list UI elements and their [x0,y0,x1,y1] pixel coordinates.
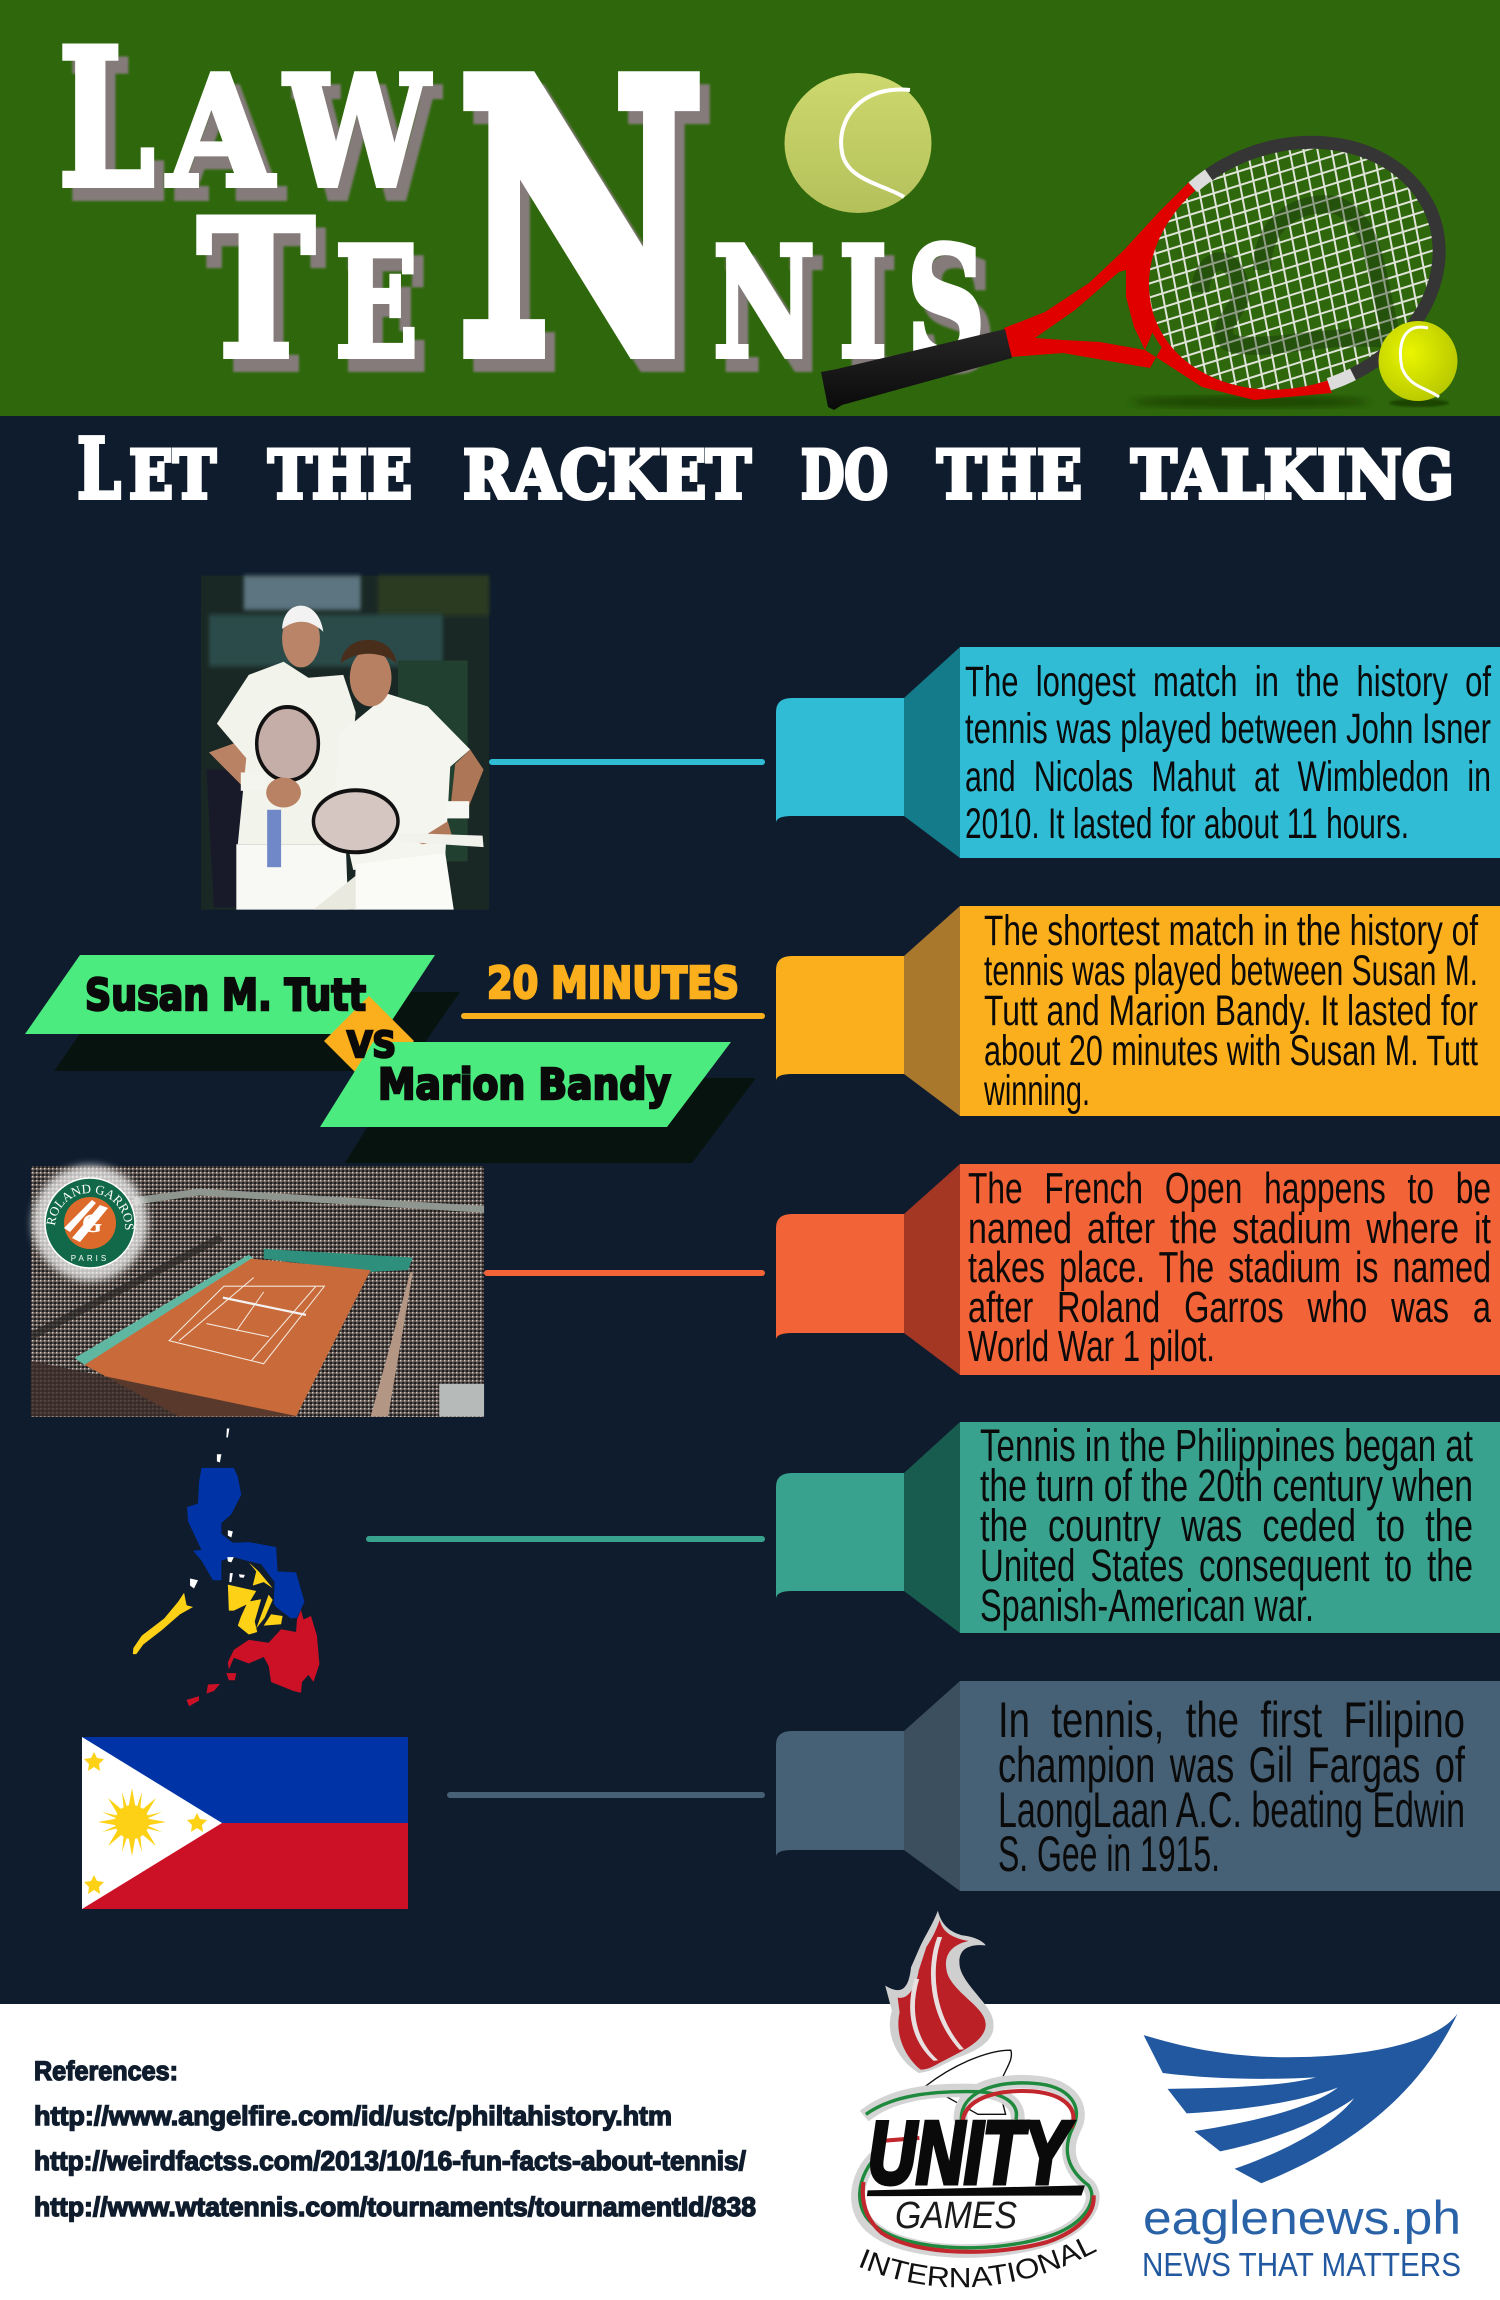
logo: Unity Games International [851,1910,1100,2288]
logo: eaglenews.ph [1142,2014,1461,2283]
references [34,2056,756,2222]
subtitle: Let the racket do the talking: THE [268,436,412,514]
footer band [0,2004,1500,2300]
logo: Unity Games International: GAMES [895,2195,1017,2237]
title: Lawn Tennis: E [335,213,418,392]
references: http://www.angelfire.com/id/ustc/philtahistory.htm [34,2101,672,2131]
title: Lawn Tennis: T [197,178,315,401]
label: 20 minutes: 20 MINUTES [487,958,739,1009]
versus graphic: Susan M. Tutt vs Marion Bandy: Marion Bandy [378,1060,671,1110]
flag of the Philippines [82,1737,408,1909]
title: Lawn Tennis: N [713,213,815,392]
logo: Unity Games International: UNITY [868,2103,1074,2202]
callout: French Open [776,1164,1500,1375]
title: Lawn Tennis: S [907,213,985,392]
photo: Isner and Mahut [201,576,489,910]
callout: longest match [776,647,1500,858]
versus graphic: Susan M. Tutt vs Marion Bandy: Susan M. Tutt [85,970,366,1021]
subtitle: Let the racket do the talking: TALKING [1131,436,1454,514]
callout: shortest match [776,906,1500,1116]
subtitle: Let the racket do the talking: DO [801,436,888,514]
logo: eaglenews.ph: eaglenews.ph [1143,2191,1461,2244]
references: http://weirdfactss.com/2013/10/16-fun-facts-about-tennis/ [34,2146,746,2176]
callout: Tennis in the Philippines: Spanish-American war. [980,1580,1314,1631]
photo: Roland Garros stadium: G [82,1209,102,1238]
callout: first Filipino champion [776,1681,1500,1891]
photo: Roland Garros stadium: ROLAND GARROS [46,1184,134,1230]
callout: first Filipino champion: S. Gee in 1915. [998,1826,1220,1882]
subtitle: Let the racket do the talking: RACKET [463,436,751,514]
icon: tennis racket [821,136,1458,410]
header band [0,0,1500,416]
logo: Unity Games International: INTERNATIONAL [860,2238,1097,2288]
callout: shortest match: winning. [983,1067,1090,1115]
logo: eaglenews.ph: NEWS THAT MATTERS [1142,2246,1461,2283]
map of the Philippines [133,1429,319,1706]
callout: Tennis in the Philippines [776,1420,1500,1633]
title: Lawn Tennis: W [283,42,431,221]
title: Lawn Tennis: N [458,4,704,438]
photo: Roland Garros stadium: PARIS [71,1254,109,1263]
references: http://www.wtatennis.com/tournaments/tournamentId/838 [34,2192,756,2222]
subtitle: Let the racket do the talking: ET [129,436,216,514]
callout: French Open: World War 1 pilot. [968,1322,1215,1371]
versus graphic: Susan M. Tutt vs Marion Bandy: VS [347,1025,396,1066]
subtitle: Let the racket do the talking [77,420,1454,518]
title: Lawn Tennis: I [839,213,887,392]
connector line: teal [366,1536,765,1542]
title: Lawn Tennis [58,4,985,438]
connector line: cyan [489,759,765,765]
connector line: orange [484,1270,765,1276]
subtitle: Let the racket do the talking: L [77,420,121,518]
connector line: slate [447,1792,765,1798]
icon: large tennis ball [784,73,932,213]
title: Lawn Tennis: L [58,7,155,230]
subtitle: Let the racket do the talking: THE [937,436,1082,514]
title: Lawn Tennis: A [166,42,275,221]
references: References: [34,2056,178,2086]
photo: Roland Garros stadium [26,1159,484,1417]
versus graphic: Susan M. Tutt vs Marion Bandy [25,955,756,1163]
